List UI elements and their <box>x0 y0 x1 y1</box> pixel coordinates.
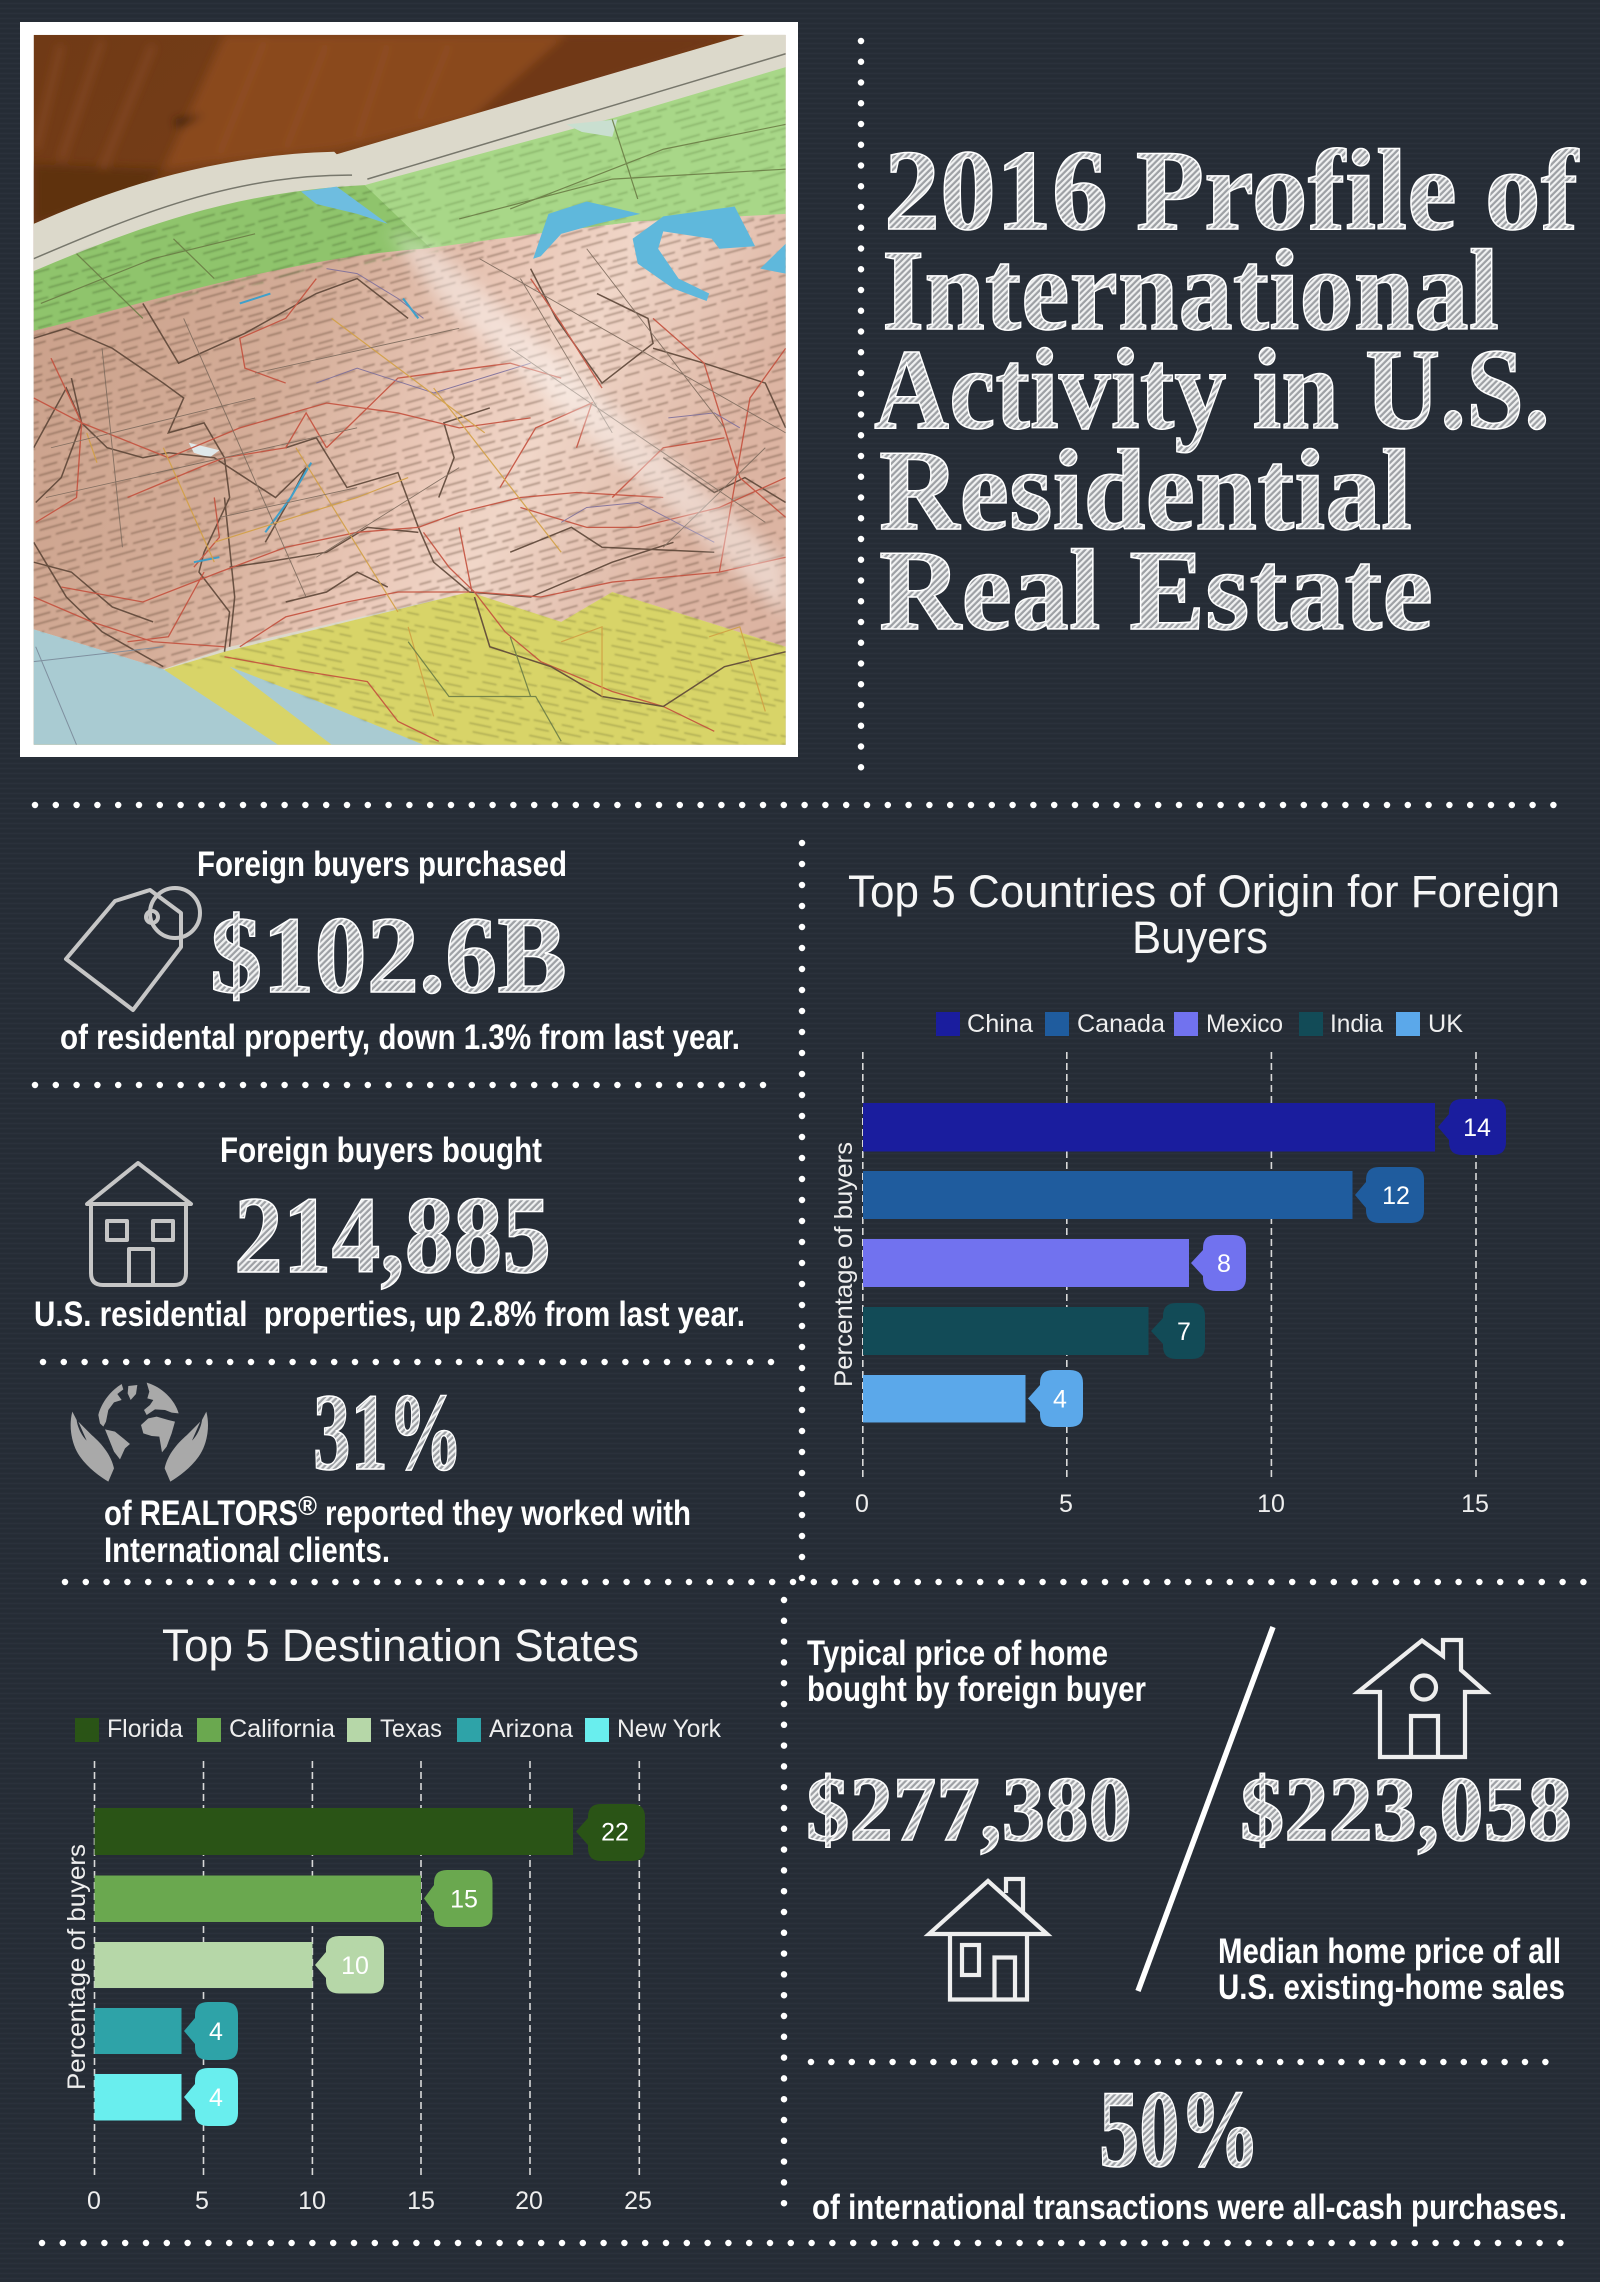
chart title: Top 5 Countries of Origin for Foreign <box>848 866 1560 917</box>
bar: UK 4 <box>863 1370 1083 1427</box>
title: Real Estate <box>879 527 1433 654</box>
big number: $277,380: $277,380 <box>806 1758 1132 1860</box>
legend: Florida <box>107 1715 183 1743</box>
legend: India <box>1330 1010 1383 1038</box>
caption: realtors reported: of REALTORS <box>104 1494 298 1533</box>
icon: price tag <box>66 888 200 1010</box>
chart title: Top 5 Destination States <box>162 1620 639 1671</box>
bar: Canada 12: 12 <box>1382 1182 1410 1210</box>
x axis labels: 10 <box>1257 1490 1285 1518</box>
x axis labels: 0 <box>87 2187 101 2215</box>
big number: 31%: 31% <box>313 1371 463 1493</box>
legend: Canada <box>1077 1010 1165 1038</box>
title: Activity in U.S. <box>874 326 1550 453</box>
big number: $223,058: $223,058 <box>1240 1758 1572 1860</box>
chart title: Buyers <box>1132 912 1268 963</box>
x axis labels: 5 <box>1059 1490 1073 1518</box>
panel: properties bought <box>34 1131 745 1334</box>
dotted divider: bottom <box>42 2240 1565 2246</box>
bar: India 7: 7 <box>1177 1318 1191 1346</box>
big number: 214,885: 214,885 <box>234 1174 551 1296</box>
dotted divider: first horizontal <box>35 802 1558 808</box>
bar: California 15: 15 <box>450 1886 478 1914</box>
dotted divider: mid horizontal <box>65 1579 1590 1585</box>
icon: house with round window <box>1358 1640 1486 1757</box>
caption: realtors reported: ® <box>298 1491 317 1521</box>
heading: foreign buyers purchased: Foreign buyers purchased <box>197 845 567 884</box>
bar: Florida 22 <box>94 1804 645 1861</box>
photo: open road atlas in white frame <box>20 22 798 757</box>
title: 2016 Profile of <box>884 127 1580 254</box>
x axis labels: 10 <box>298 2187 326 2215</box>
bar: Texas 10: 10 <box>341 1952 369 1980</box>
bar: New York 4: 4 <box>209 2084 223 2112</box>
bar: California 15 <box>94 1870 492 1927</box>
legend: UK <box>1428 1010 1463 1038</box>
bar: Mexico 8 <box>863 1235 1246 1291</box>
caption: realtors reported: International clients. <box>104 1531 390 1570</box>
text: typical price: bought by foreign buyer <box>807 1670 1146 1709</box>
bar: India 7 <box>863 1303 1205 1359</box>
dotted divider: lower right <box>811 2059 1550 2065</box>
x axis labels: 5 <box>195 2187 209 2215</box>
dotted divider: left 2 <box>35 1082 772 1088</box>
legend: California <box>229 1715 335 1743</box>
caption: realtors reported: reported they worked with <box>325 1494 691 1533</box>
bar: Canada 12 <box>863 1167 1424 1223</box>
icon: hands holding globe <box>71 1383 208 1482</box>
bar: Arizona 4 <box>94 2002 238 2060</box>
title <box>874 127 1580 654</box>
chart title <box>848 866 1560 963</box>
x axis labels <box>855 1490 1489 1518</box>
x axis labels: 20 <box>515 2187 543 2215</box>
dotted divider: mid vertical <box>799 843 805 1590</box>
bar: New York 4 <box>94 2068 238 2126</box>
arrow: slash divider <box>1138 1627 1273 1991</box>
heading: foreign buyers bought: Foreign buyers bought <box>220 1131 542 1170</box>
text: typical price: Typical price of home <box>807 1634 1108 1673</box>
panel: all-cash purchases <box>812 2068 1567 2227</box>
x axis labels: 25 <box>624 2187 652 2215</box>
y axis label: Percentage of buyers <box>63 1844 91 2090</box>
panel: realtors with international clients <box>71 1371 691 1570</box>
bar: China 14: 14 <box>1463 1114 1491 1142</box>
chart: top 5 destination states <box>63 1620 721 2215</box>
icon: house <box>87 1163 191 1285</box>
x axis labels: 15 <box>407 2187 435 2215</box>
bar: UK 4: 4 <box>1053 1386 1067 1414</box>
caption: U.S. residential properties: U.S. residential properties, up 2.8% from last year. <box>34 1295 745 1334</box>
chart: top 5 countries of origin <box>830 866 1560 1518</box>
panel: price comparison <box>806 1627 1572 2007</box>
bar: Mexico 8: 8 <box>1217 1250 1231 1278</box>
big number: $102.6B: $102.6B <box>210 894 567 1016</box>
legend: Texas <box>380 1715 442 1743</box>
big number: 50%: 50% <box>1099 2068 1260 2190</box>
legend: Arizona <box>489 1715 573 1743</box>
bar: Texas 10 <box>94 1936 384 1994</box>
x axis labels: 15 <box>1461 1490 1489 1518</box>
panel: dollar volume <box>60 845 740 1057</box>
title: Residential <box>879 427 1412 554</box>
caption: residential property: of residental property, down 1.3% from last year. <box>60 1018 740 1057</box>
legend: Mexico <box>1206 1010 1283 1038</box>
y axis label: Percentage of buyers <box>830 1142 858 1387</box>
title: International <box>882 227 1499 354</box>
bar: Arizona 4: 4 <box>209 2018 223 2046</box>
bar: China 14 <box>863 1099 1506 1155</box>
bar: Florida 22: 22 <box>601 1818 629 1846</box>
legend: China <box>967 1010 1033 1038</box>
dotted divider: left 3 <box>43 1359 781 1365</box>
dotted divider: top vertical <box>858 41 864 770</box>
legend: New York <box>617 1715 721 1743</box>
x axis labels: 0 <box>855 1490 869 1518</box>
icon: house with chimney <box>929 1879 1047 2000</box>
x axis labels <box>87 2187 652 2215</box>
legend <box>75 1715 721 1743</box>
legend <box>936 1010 1463 1038</box>
dotted divider: lower vertical <box>781 1600 787 2205</box>
